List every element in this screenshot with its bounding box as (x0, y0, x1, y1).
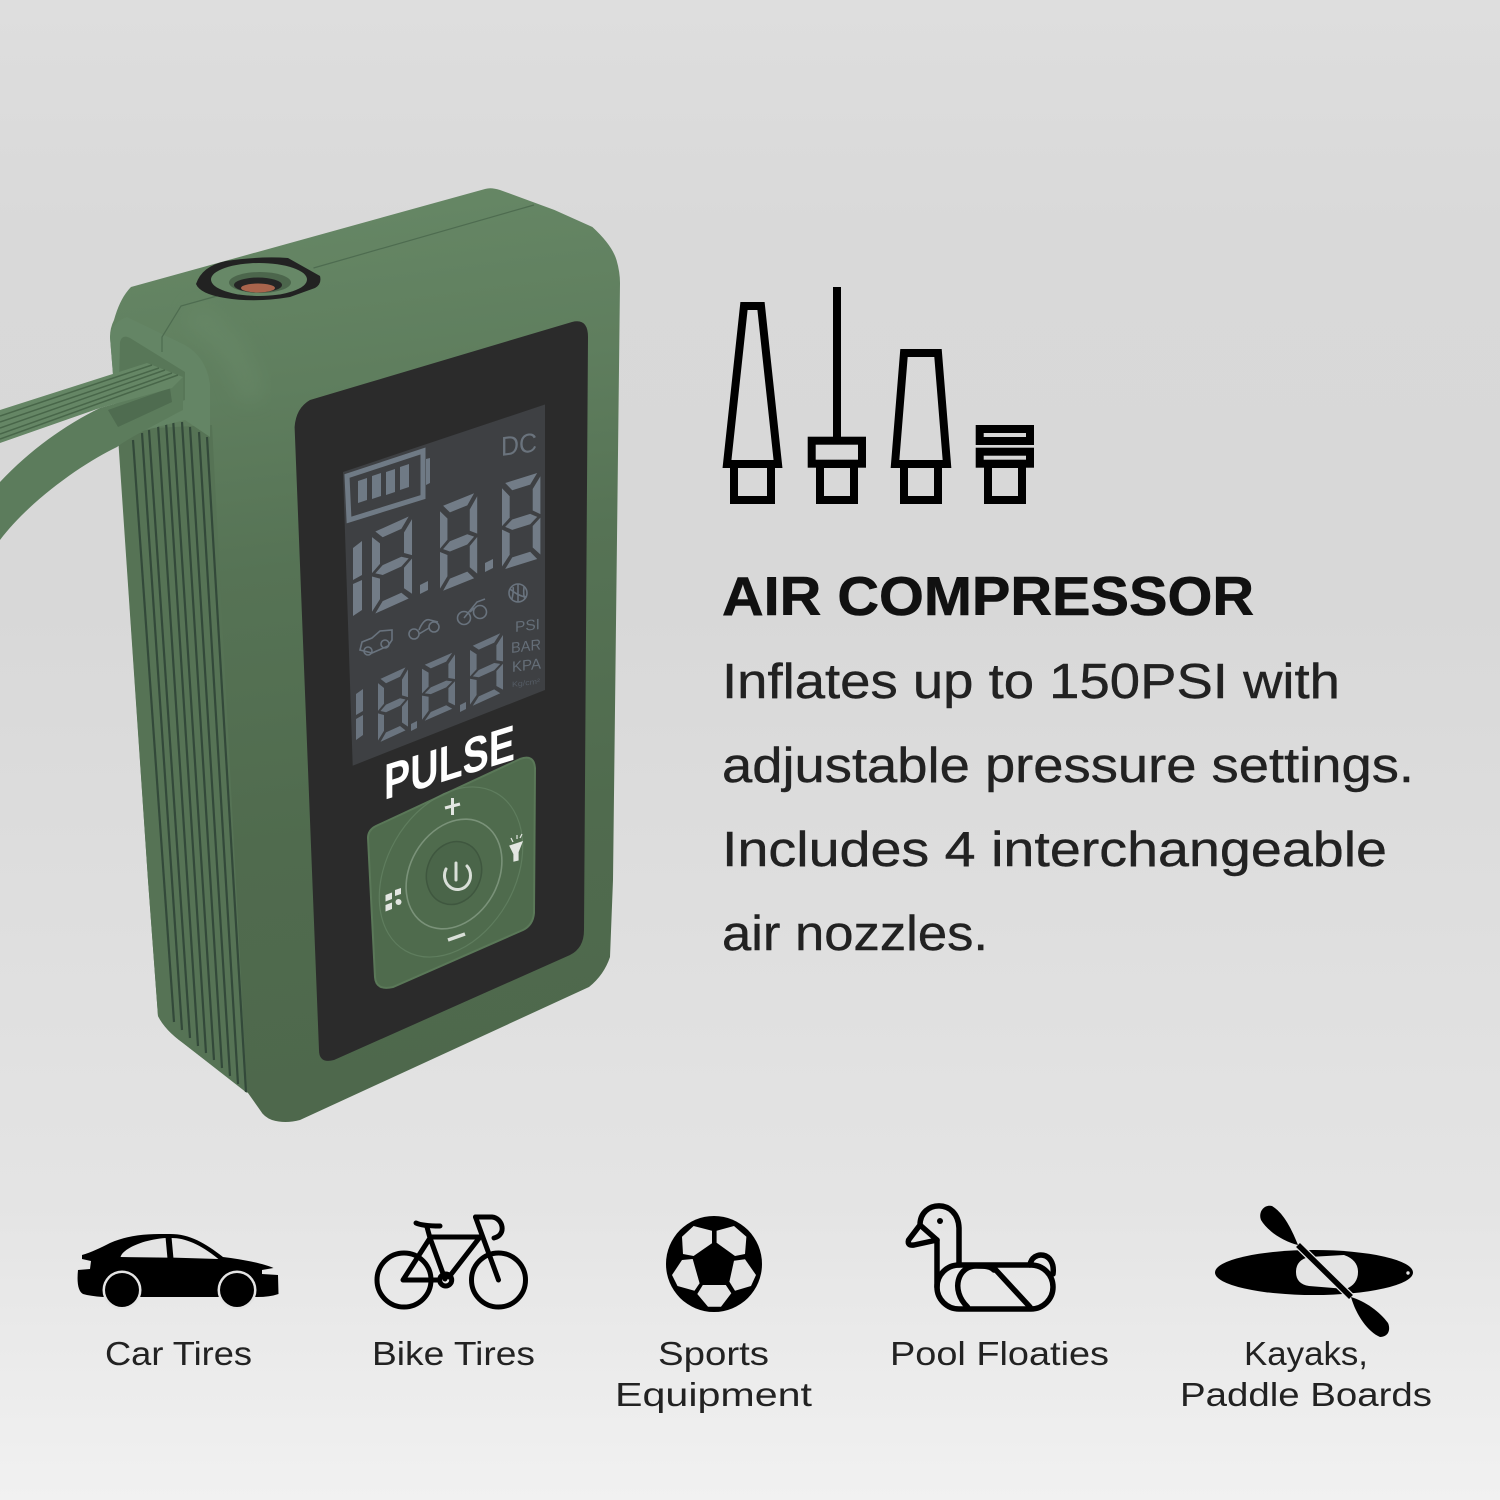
label: pool floaties: Pool Floaties (890, 1335, 1109, 1372)
black front panel (295, 321, 588, 1061)
icon: kayak and paddle (1215, 1206, 1413, 1337)
flashlight icon (510, 834, 522, 861)
lower readout digits (356, 632, 503, 743)
plus icon (445, 798, 460, 815)
pressure unit labels: Kg/cm² (512, 677, 541, 689)
nozzle 4 (980, 429, 1030, 500)
description text: adjustable pressure settings. (722, 739, 1414, 793)
heading: air compressor: AIR COMPRESSOR (722, 565, 1254, 627)
icon: bike (377, 1217, 526, 1307)
label: sports equipment (615, 1335, 812, 1413)
lower hose strap (0, 377, 183, 540)
icon: car (78, 1234, 278, 1310)
upper hose strap (0, 363, 183, 443)
description text (722, 655, 1414, 961)
mode dots icon (386, 888, 401, 912)
upper readout digits (353, 472, 540, 616)
battery icon (347, 451, 430, 520)
nozzle 2: needle (812, 287, 862, 500)
LCD display (343, 404, 545, 766)
label: sports equipment: Equipment (615, 1376, 812, 1413)
label: sports equipment: Sports (658, 1335, 769, 1372)
pressure unit labels: PSI (515, 616, 540, 636)
air valve (196, 257, 320, 300)
PULSE logo: PULSE (384, 715, 515, 811)
control button pad (350, 758, 552, 988)
minus icon (448, 934, 465, 940)
icon: soccer ball (666, 1216, 762, 1312)
description text: air nozzles. (722, 907, 988, 961)
soft highlight on upper bevel (190, 315, 252, 400)
pressure unit labels: BAR (511, 636, 541, 657)
description text: Inflates up to 150PSI with (722, 655, 1340, 709)
label: kayaks, paddle boards: Paddle Boards (1180, 1376, 1432, 1413)
DC label: DC (501, 426, 537, 462)
strap end cap (110, 317, 210, 437)
strap slot (118, 337, 185, 424)
side panel with ribs (118, 418, 247, 1093)
icon: duck pool float (908, 1206, 1053, 1309)
description text: Includes 4 interchangeable (722, 823, 1387, 877)
nozzle 1 (727, 306, 778, 500)
device body silhouette (110, 188, 620, 1122)
mode dot (396, 899, 402, 905)
pressure unit labels: KPA (512, 656, 541, 676)
label: kayaks, paddle boards (1180, 1335, 1432, 1413)
pressure unit labels (511, 616, 541, 689)
product: air compressor device (0, 188, 620, 1122)
label: kayaks, paddle boards: Kayaks, (1244, 1335, 1368, 1372)
seam lines (162, 205, 534, 352)
label: bike tires: Bike Tires (372, 1335, 535, 1372)
mode icons: car, motorbike, bicycle, ball (360, 584, 527, 655)
power icon (444, 863, 470, 890)
nozzle 3 (895, 353, 947, 500)
label: car tires: Car Tires (105, 1335, 252, 1372)
icon: four air nozzles (727, 287, 1030, 500)
